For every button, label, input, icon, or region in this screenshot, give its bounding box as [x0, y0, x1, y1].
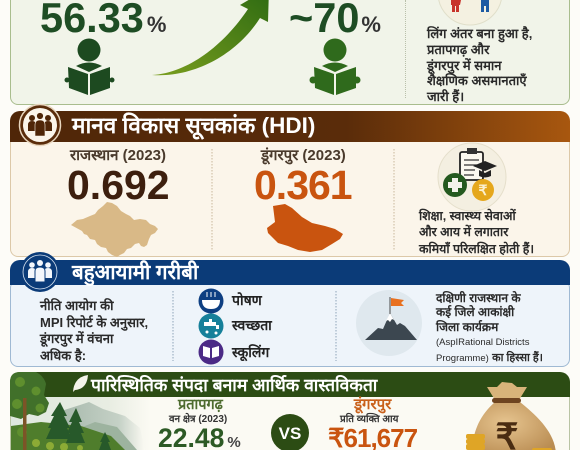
badge: VS: VS	[279, 424, 301, 443]
icon: reader green	[310, 38, 360, 95]
icon: gender figures	[438, 0, 502, 25]
HDI deprivation text	[418, 208, 534, 256]
divider	[405, 0, 406, 98]
gender gap text: डूंगरपुर में समान	[427, 58, 501, 73]
icon: schooling book	[198, 340, 224, 364]
icon: poverty people badge	[20, 252, 60, 292]
icon: reader dark	[64, 38, 114, 95]
label: forest area: वन क्षेत्र (2023)	[169, 414, 227, 425]
heading: poverty: बहुआयामी गरीबी	[72, 261, 198, 284]
icon: leaf	[73, 375, 88, 392]
label: per capita income: प्रति व्यक्ति आय	[340, 414, 398, 425]
aspirational district text: दक्षिणी राजस्थान के	[436, 291, 521, 305]
heading: ecology: पारिस्थितिक संपदा बनाम आर्थिक वास्तविकता	[91, 375, 377, 395]
panel: poverty header	[10, 260, 570, 285]
map: Rajasthan	[71, 202, 158, 257]
poverty intro text: डूंगरपुर में वंचना	[40, 331, 113, 346]
icon: HDI people badge	[20, 104, 60, 146]
divider	[172, 291, 174, 361]
poverty intro text: अधिक है:	[40, 348, 86, 363]
icon: health education income: ₹	[479, 182, 488, 198]
panel: ecology header	[10, 372, 570, 397]
poverty intro text: MPI रिपोर्ट के अनुसार,	[40, 315, 148, 330]
gender gap text: जारी हैं।	[427, 89, 464, 104]
aspirational district text: (AspIRational Districts	[436, 337, 529, 348]
gender gap text: लिंग अंतर बना हुआ है,	[427, 26, 532, 41]
gender gap text: प्रतापगढ़ और	[427, 42, 489, 57]
panel: education	[10, 0, 570, 105]
badge: VS	[271, 414, 309, 450]
label: sanitation: स्वच्छता	[232, 317, 272, 333]
icon: health education income	[438, 143, 506, 211]
poverty intro text: नीति आयोग की	[40, 298, 113, 313]
aspirational district text: कई जिले आकांक्षी	[436, 305, 514, 319]
label: schooling: स्कूलिंग	[232, 344, 269, 360]
icon: sanitation tap	[198, 314, 224, 338]
label: Pratapgarh: प्रतापगढ़	[178, 397, 223, 413]
gender gap text: शैक्षणिक असमानताएँ	[427, 73, 527, 88]
label: nutrition: पोषण	[232, 292, 262, 308]
panel: ecology body	[10, 385, 570, 450]
aspirational district text	[436, 291, 543, 364]
panel: HDI header	[10, 111, 570, 142]
icon: nutrition bowl	[198, 288, 224, 314]
icon: mountain flag	[356, 290, 422, 356]
aspirational district text: Programme) का हिस्सा हैं।	[436, 352, 543, 364]
illustration: forest landscape	[10, 372, 150, 450]
divider	[211, 149, 213, 250]
value: 0.361: 0.361	[254, 162, 352, 208]
map: Dungarpur	[267, 204, 343, 252]
illustration: money bag	[466, 382, 556, 450]
label: Dungarpur: डूंगरपुर	[354, 396, 391, 413]
panel: HDI body	[10, 135, 570, 257]
label: Dungarpur: डूंगरपुर (2023)	[261, 147, 346, 164]
HDI deprivation text: शिक्षा, स्वास्थ्य सेवाओं	[419, 209, 516, 223]
label: Rajasthan: राजस्थान (2023)	[70, 147, 166, 164]
HDI deprivation text: कमियाँ परिलक्षित होती हैं।	[419, 242, 534, 256]
poverty intro text	[40, 298, 148, 363]
arrow: rising trend	[152, 0, 269, 75]
value: 0.692: 0.692	[67, 162, 170, 208]
gender gap text	[426, 26, 532, 104]
aspirational district text: जिला कार्यक्रम	[436, 320, 498, 334]
heading: HDI: मानव विकास सूचकांक (HDI)	[72, 113, 315, 138]
HDI deprivation text: और आय में लगातार	[419, 225, 508, 239]
panel: poverty body	[10, 280, 570, 367]
